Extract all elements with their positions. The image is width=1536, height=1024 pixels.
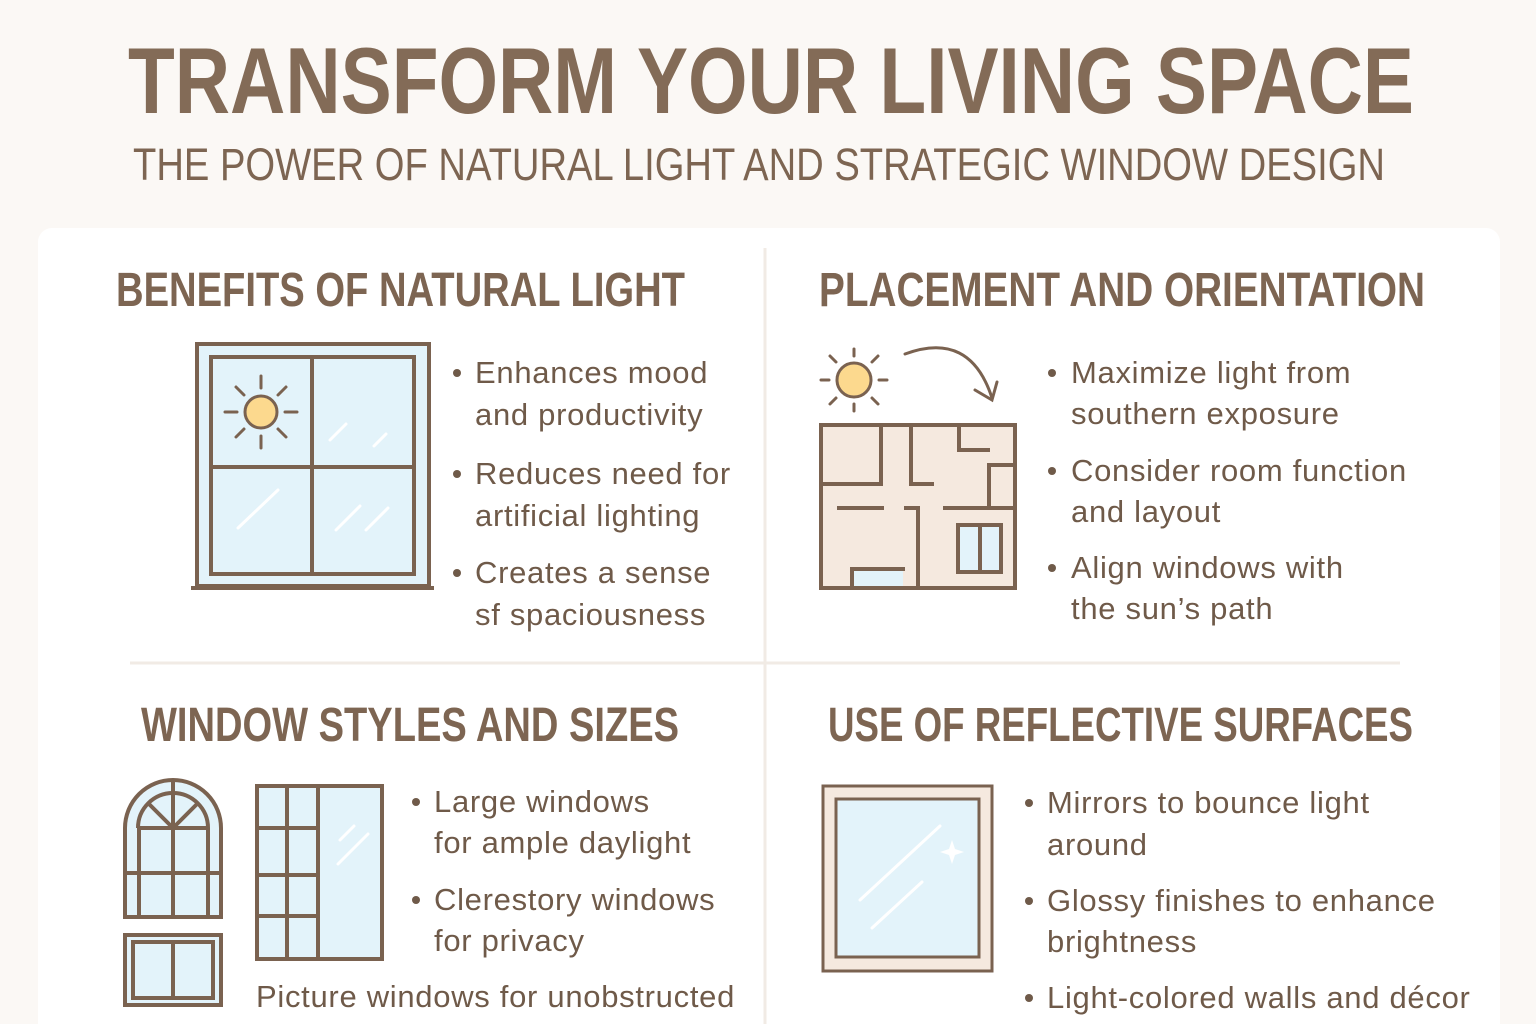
icon: sun with arrow bbox=[821, 348, 997, 411]
bullets: window styles: Large windows bbox=[434, 784, 650, 819]
icon: window with sun bbox=[191, 344, 434, 588]
bullets: benefits: and productivity bbox=[475, 397, 703, 432]
bullets: placement: southern exposure bbox=[1071, 396, 1340, 431]
bullets: window styles: Picture windows for unobstructed bbox=[256, 979, 735, 1014]
icon: arched window bbox=[125, 780, 221, 917]
bullets: benefits: sf spaciousness bbox=[475, 597, 706, 632]
main card bbox=[38, 228, 1500, 1024]
icon: floor plan bbox=[821, 425, 1015, 588]
bullets: benefits: Reduces need for bbox=[475, 456, 731, 491]
icon: small sliding window bbox=[125, 935, 221, 1005]
bullets: placement: Maximize light from bbox=[1071, 355, 1351, 390]
bullets: window styles: for privacy bbox=[434, 923, 585, 958]
bullets: placement: Consider room function bbox=[1071, 453, 1407, 488]
bullets: placement: and layout bbox=[1071, 494, 1221, 529]
heading: benefits: BENEFITS OF NATURAL LIGHT bbox=[116, 264, 685, 317]
bullets: placement: Align windows with bbox=[1071, 550, 1344, 585]
bullets: reflective: Mirrors to bounce light bbox=[1047, 785, 1370, 820]
bullets: reflective: Glossy finishes to enhance bbox=[1047, 883, 1436, 918]
heading: window styles: WINDOW STYLES AND SIZES bbox=[141, 699, 679, 752]
panel: reflective surfaces bbox=[823, 699, 1471, 1015]
bullets: reflective: brightness bbox=[1047, 924, 1197, 959]
bullets: benefits bbox=[453, 355, 731, 632]
bullets: reflective: around bbox=[1047, 827, 1148, 862]
bullets: reflective: Light-colored walls and décor bbox=[1047, 980, 1471, 1015]
bullets: benefits: artificial lighting bbox=[475, 498, 700, 533]
panel: placement bbox=[819, 264, 1425, 626]
icon: tall window bbox=[257, 786, 382, 959]
bullets: benefits: Creates a sense bbox=[475, 555, 711, 590]
bullets: window styles bbox=[256, 784, 735, 1014]
bullets: reflective bbox=[1025, 785, 1471, 1015]
bullets: window styles: Clerestory windows bbox=[434, 882, 715, 917]
bullets: window styles: for ample daylight bbox=[434, 825, 691, 860]
bullets: benefits: Enhances mood bbox=[475, 355, 708, 390]
panel: window styles bbox=[125, 699, 735, 1014]
panel: benefits bbox=[116, 264, 731, 632]
bullets: placement: the sun’s path bbox=[1071, 591, 1273, 626]
bullets: placement bbox=[1048, 355, 1407, 626]
icon: mirror bbox=[823, 786, 992, 971]
